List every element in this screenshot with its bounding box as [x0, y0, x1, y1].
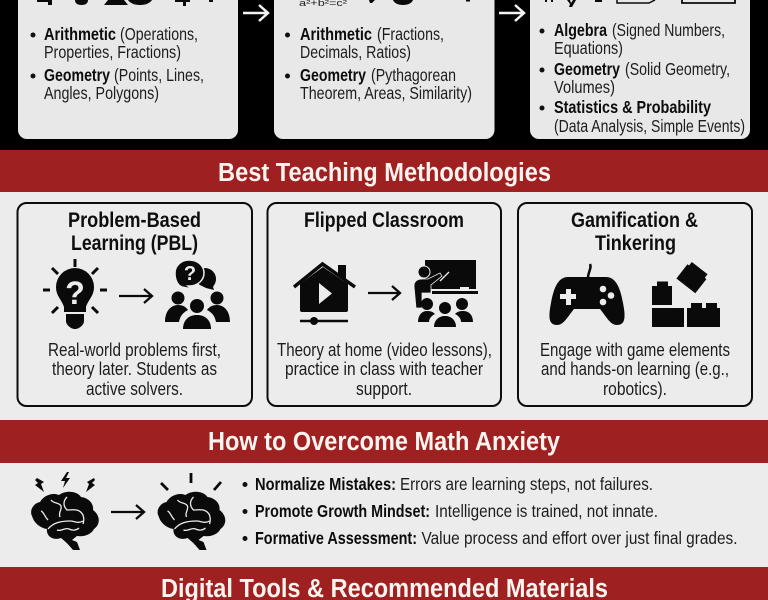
section banner: overcome math anxiety: How to Overcome Math Anxiety [208, 428, 561, 456]
icon: student group with speech bubbles [165, 260, 230, 329]
bullet list: arithmetic and geometry [285, 24, 472, 103]
bullet list: algebra, geometry, statistics: (Solid Geometry, [625, 59, 730, 79]
bullet list: arithmetic and geometry: Theorem, Areas, Similarity) [300, 83, 472, 103]
heading: problem-based learning: Learning (PBL) [71, 231, 198, 255]
bullet list: anxiety strategies: Promote Growth Mindset: [255, 501, 430, 521]
text: gamification description: Engage with game elements [540, 340, 730, 360]
icon: building blocks [652, 261, 720, 327]
bullet list: anxiety strategies: Errors are learning steps, not failures. [400, 474, 653, 494]
arrow: second to third stage [499, 5, 524, 21]
panel: gamification and tinkering [518, 203, 752, 406]
icon: student group with speech bubbles: ? [184, 263, 196, 285]
section banner: best teaching methodologies [0, 150, 768, 192]
bullet list: arithmetic and geometry: (Fractions, [377, 24, 444, 44]
bullet list: anxiety strategies [242, 474, 738, 548]
bullet list: arithmetic and geometry: Properties, Fractions) [44, 42, 181, 62]
text: flipped classroom description: Theory at home (video lessons), [277, 340, 492, 360]
icon: teacher at board with students [414, 260, 478, 327]
bullet list: anxiety strategies: Intelligence is trained, not innate. [435, 501, 658, 521]
text: pbl description: theory later. Students as [52, 359, 217, 379]
icon: calm brain with rays [158, 473, 225, 550]
bullet list: anxiety strategies: Formative Assessment: [255, 528, 417, 548]
panel: problem-based learning [18, 203, 252, 406]
section banner: best teaching methodologies: Best Teaching Methodologies [218, 159, 551, 187]
panel: flipped classroom [268, 203, 501, 406]
icon row: numbers and shapes (cropped) [37, 0, 213, 6]
arrow: home to classroom [368, 286, 400, 300]
bullet list: algebra, geometry, statistics: Equations) [554, 38, 623, 58]
text: flipped classroom description [277, 340, 492, 399]
heading: gamification and tinkering: Gamification & [571, 208, 698, 232]
bullet list: arithmetic and geometry: Angles, Polygons) [44, 83, 159, 103]
text: gamification description: and hands-on learning (e.g., [541, 359, 729, 379]
icon: stressed brain with lightning [31, 472, 99, 550]
bullet list: arithmetic and geometry: (Operations, [120, 24, 198, 44]
bullet list: algebra, geometry, statistics: Algebra [554, 20, 607, 40]
arrow: problem to students [119, 289, 152, 303]
bullet list: algebra, geometry, statistics: (Signed Numbers, [612, 20, 725, 40]
panel: grades 4-6 curriculum [274, 0, 494, 139]
bullet list: algebra, geometry, statistics: Volumes) [554, 77, 615, 97]
bullet list: arithmetic and geometry: (Pythagorean [371, 65, 456, 85]
text: pbl description: Real-world problems first, [48, 340, 221, 360]
icon row: equation and solids (cropped) [545, 0, 735, 7]
text: flipped classroom description: practice in class with teacher [285, 359, 483, 379]
bullet list: anxiety strategies: Normalize Mistakes: [255, 474, 396, 494]
bullet list: arithmetic and geometry: Geometry [300, 65, 366, 85]
icon: lightbulb with question mark [43, 259, 107, 329]
bullet list: algebra, geometry, statistics [540, 20, 745, 136]
text: flipped classroom description: support. [356, 379, 412, 399]
section banner: overcome math anxiety [0, 420, 768, 463]
bullet list: arithmetic and geometry: Geometry [44, 65, 110, 85]
icon: lightbulb with question mark: ? [65, 275, 85, 311]
bullet list: algebra, geometry, statistics: Geometry [554, 59, 620, 79]
heading: problem-based learning: Problem-Based [68, 208, 201, 232]
heading: problem-based learning [68, 208, 201, 255]
section banner: digital tools and materials [0, 567, 768, 600]
icon row: formula and shapes (cropped) [299, 0, 470, 8]
bullet list: arithmetic and geometry: Arithmetic [300, 24, 372, 44]
bullet list: arithmetic and geometry: (Points, Lines, [114, 65, 204, 85]
heading: gamification and tinkering [571, 208, 698, 255]
heading: gamification and tinkering: Tinkering [595, 231, 676, 255]
text: gamification description [540, 340, 730, 399]
text: pbl description: active solvers. [86, 379, 183, 399]
arrow: first to second stage [243, 5, 268, 21]
panel: grades 7-8 curriculum [530, 0, 750, 139]
text: gamification description: robotics). [603, 379, 667, 399]
bullet list: arithmetic and geometry [30, 24, 204, 103]
bullet list: arithmetic and geometry: Decimals, Ratios) [300, 42, 411, 62]
panel: grades 1-3 curriculum [18, 0, 238, 139]
heading: flipped classroom: Flipped Classroom [304, 208, 464, 232]
bullet list: algebra, geometry, statistics: Statistics & Probability [554, 97, 711, 117]
icon: home with video lesson [294, 264, 355, 325]
arrow: stress to calm [111, 505, 144, 519]
text: pbl description [48, 340, 221, 399]
icon: game controller [549, 264, 625, 325]
bullet list: arithmetic and geometry: Arithmetic [44, 24, 116, 44]
